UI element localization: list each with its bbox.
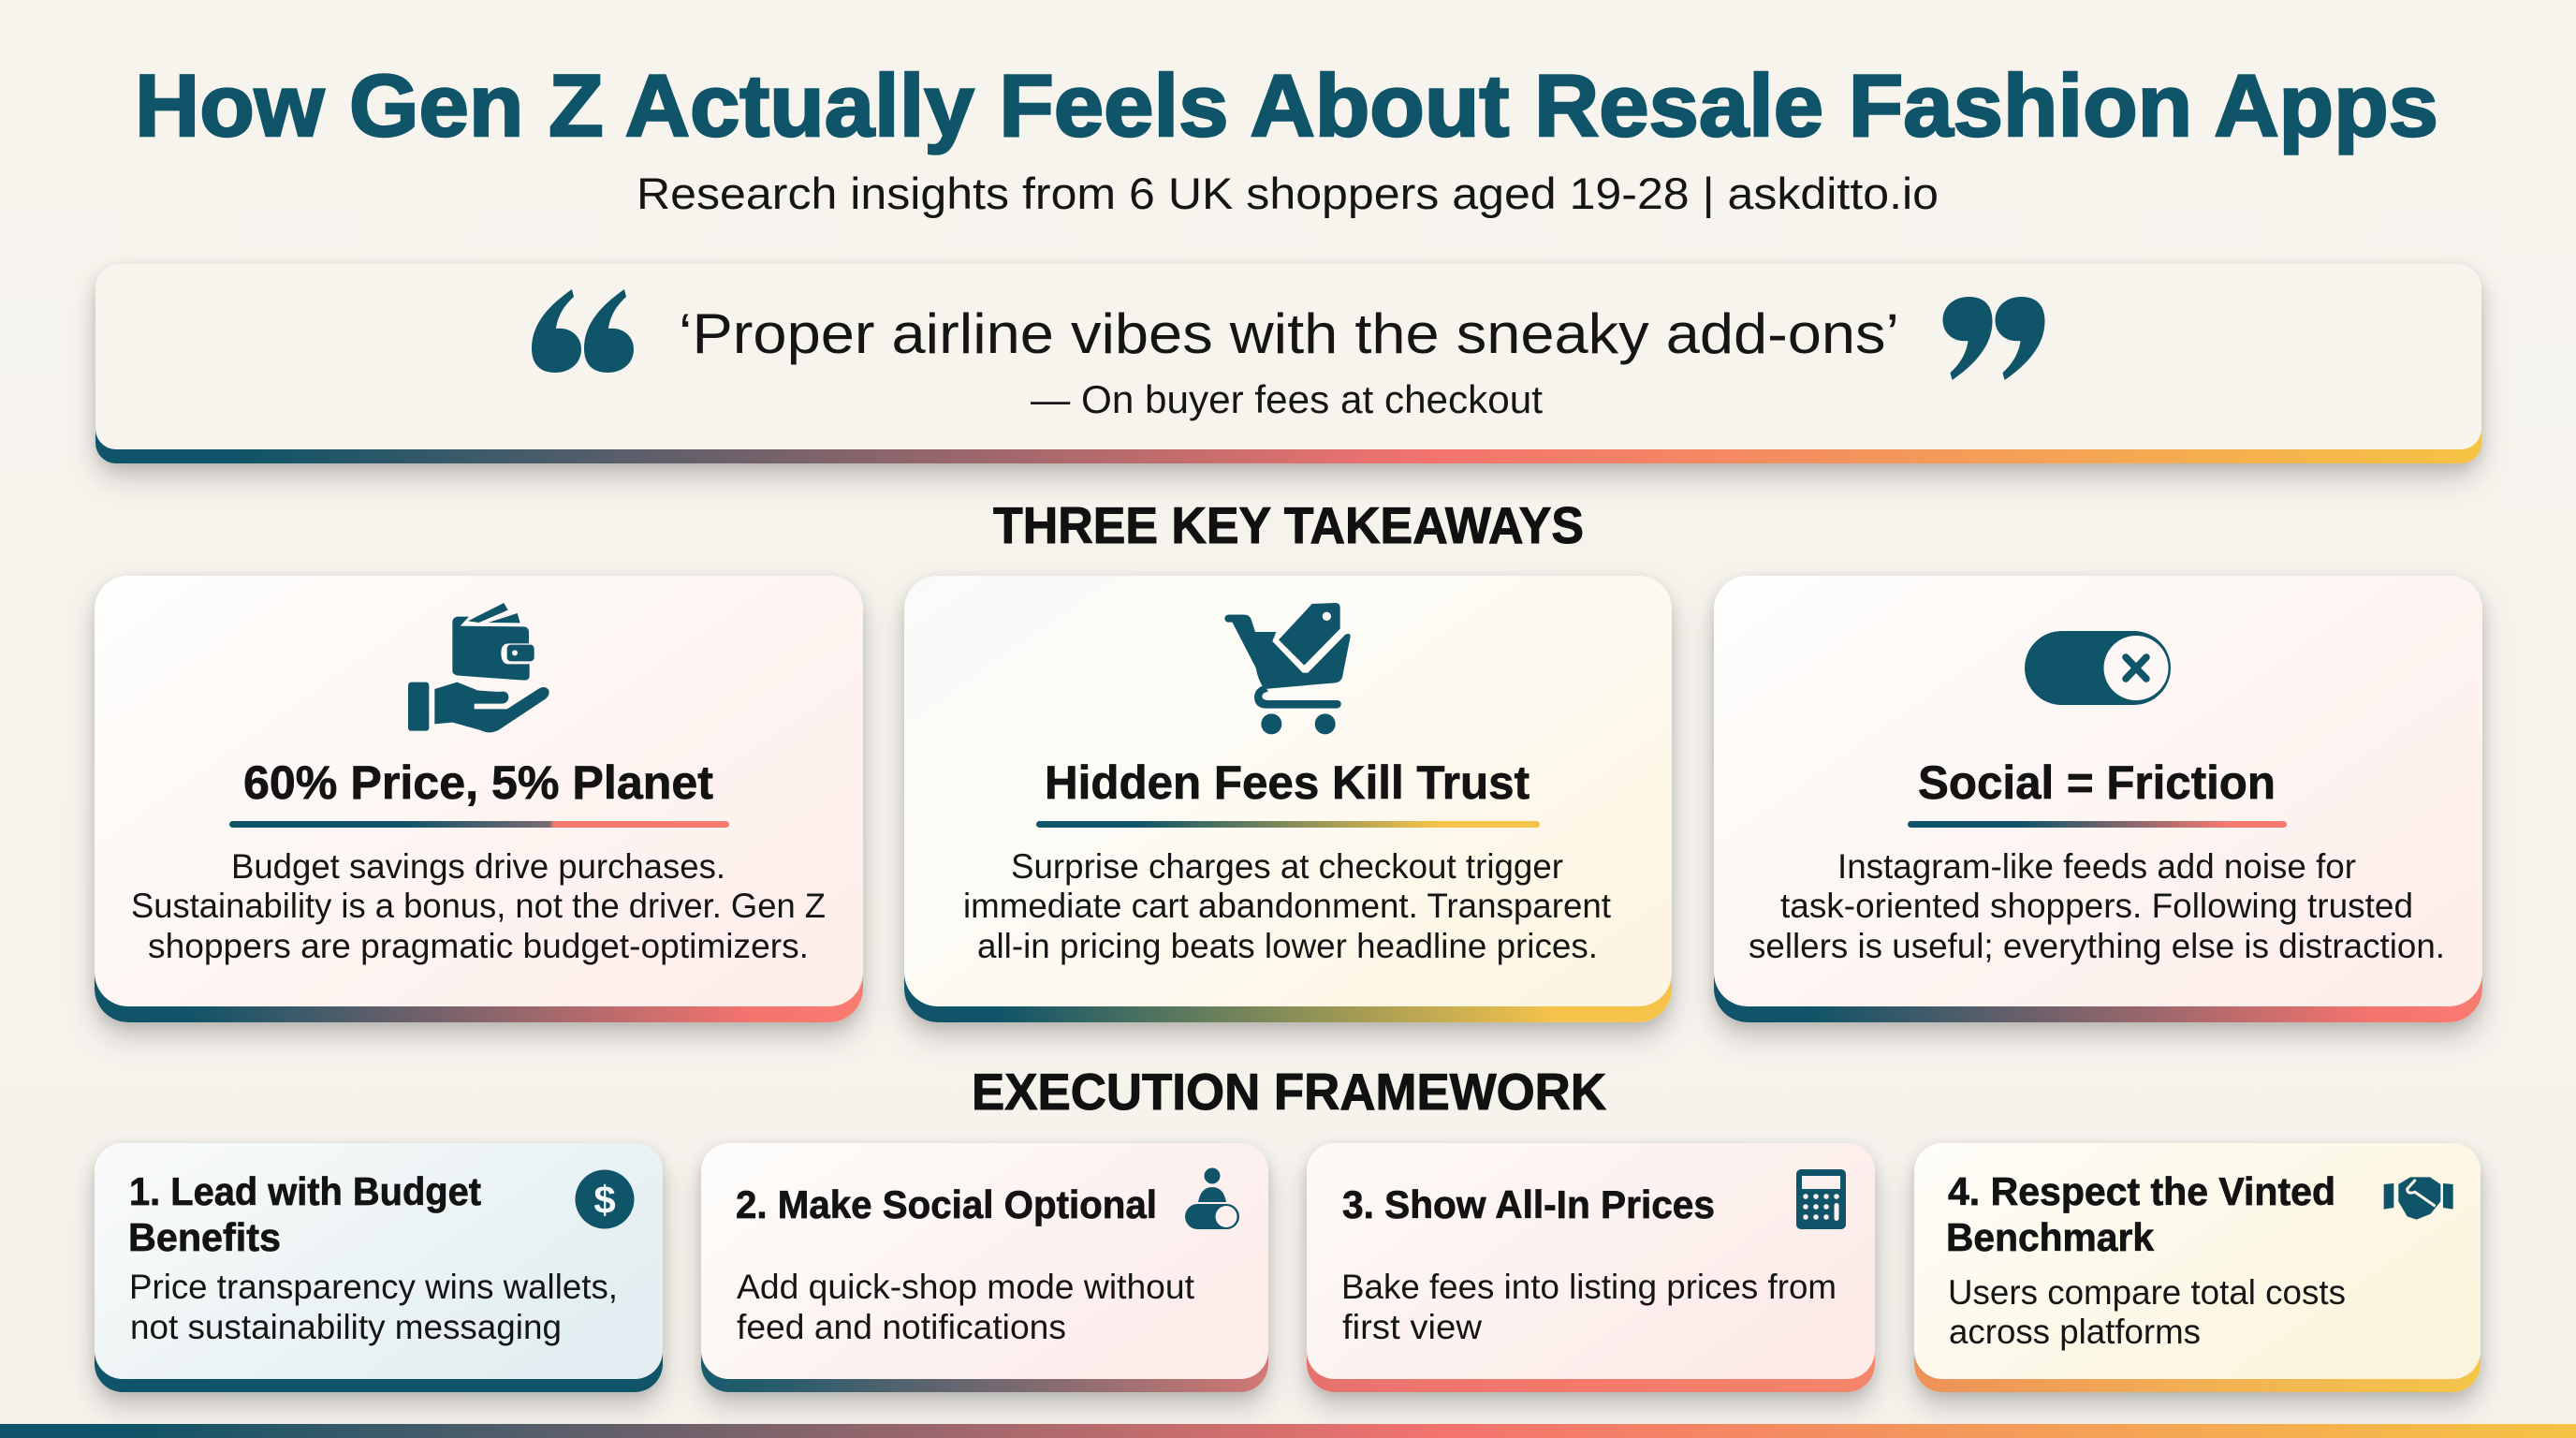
- step description: first view: [1342, 1308, 1482, 1346]
- panel: step 2: [701, 1143, 1268, 1392]
- underline: [229, 821, 729, 828]
- panel: takeaway 1: [95, 576, 863, 1022]
- body text: Instagram-like feeds add noise for: [1837, 847, 2356, 886]
- body text: [1749, 847, 2445, 965]
- heading: three key takeaways: THREE KEY TAKEAWAYS: [993, 496, 1584, 554]
- body text: task-oriented shoppers. Following trusted: [1780, 887, 2413, 925]
- step description: [129, 1268, 618, 1346]
- heading: Hidden Fees Kill Trust: [1045, 756, 1530, 809]
- icon: opening quote mark: [532, 289, 634, 373]
- icon: toggle off: [2025, 631, 2171, 705]
- step description: Bake fees into listing prices from: [1341, 1268, 1837, 1306]
- step title: 2. Make Social Optional: [736, 1182, 1157, 1226]
- panel: step 3: [1307, 1143, 1875, 1392]
- quote text: ‘Proper airline vibes with the sneaky add-ons’: [679, 302, 1899, 365]
- body text: immediate cart abandonment. Transparent: [963, 887, 1612, 925]
- panel: takeaway 3: [1714, 576, 2482, 1022]
- icon: cart with price tag: [1224, 603, 1351, 734]
- step title: Benchmark: [1946, 1215, 2155, 1259]
- step title: 1. Lead with Budget: [129, 1169, 481, 1213]
- icon: person with toggle: [1185, 1168, 1239, 1229]
- body text: Surprise charges at checkout trigger: [1011, 847, 1563, 886]
- step title: [1946, 1169, 2335, 1259]
- body text: sellers is useful; everything else is distraction.: [1749, 927, 2445, 965]
- icon: handshake: [2384, 1177, 2453, 1220]
- step description: Price transparency wins wallets,: [129, 1268, 618, 1306]
- footer gradient bar: [0, 1424, 2576, 1438]
- panel: takeaway 2: [904, 576, 1672, 1022]
- icon: dollar coin: [575, 1170, 635, 1228]
- subtitle: Research insights from 6 UK shoppers aged 19-28 | askditto.io: [637, 169, 1939, 218]
- heading: 60% Price, 5% Planet: [243, 756, 713, 809]
- step description: not sustainability messaging: [130, 1308, 562, 1346]
- step title: [128, 1169, 481, 1259]
- panel: quote: [95, 264, 2481, 463]
- body text: [131, 847, 826, 965]
- step description: across platforms: [1949, 1313, 2201, 1351]
- icon: calculator: [1796, 1169, 1846, 1229]
- icon: dollar coin: $: [593, 1178, 616, 1222]
- icon: wallet on hand: [408, 603, 549, 732]
- heading: execution framework: EXECUTION FRAMEWORK: [972, 1063, 1606, 1121]
- step description: [1341, 1268, 1837, 1346]
- body text: Budget savings drive purchases.: [231, 847, 725, 886]
- step description: Users compare total costs: [1948, 1273, 2346, 1312]
- quote attribution: — On buyer fees at checkout: [1031, 377, 1543, 421]
- step description: feed and notifications: [737, 1308, 1066, 1346]
- step description: [1948, 1273, 2346, 1351]
- underline: [1036, 821, 1540, 828]
- step title: 3. Show All-In Prices: [1342, 1182, 1715, 1226]
- underline: [1908, 821, 2287, 828]
- body text: [963, 847, 1612, 965]
- step description: Add quick-shop mode without: [737, 1268, 1195, 1306]
- body text: shoppers are pragmatic budget-optimizers.: [148, 927, 809, 965]
- heading: Social = Friction: [1918, 756, 2276, 809]
- step title: Benefits: [128, 1215, 281, 1259]
- title: How Gen Z Actually Feels About Resale Fashion Apps: [135, 56, 2438, 154]
- step description: [737, 1268, 1195, 1346]
- body text: all-in pricing beats lower headline prices.: [977, 927, 1598, 965]
- panel: step 1: [95, 1143, 663, 1392]
- body text: Sustainability is a bonus, not the driver. Gen Z: [131, 887, 826, 925]
- step title: 4. Respect the Vinted: [1948, 1169, 2335, 1213]
- panel: step 4: [1914, 1143, 2481, 1392]
- icon: closing quote mark: [1943, 297, 2044, 380]
